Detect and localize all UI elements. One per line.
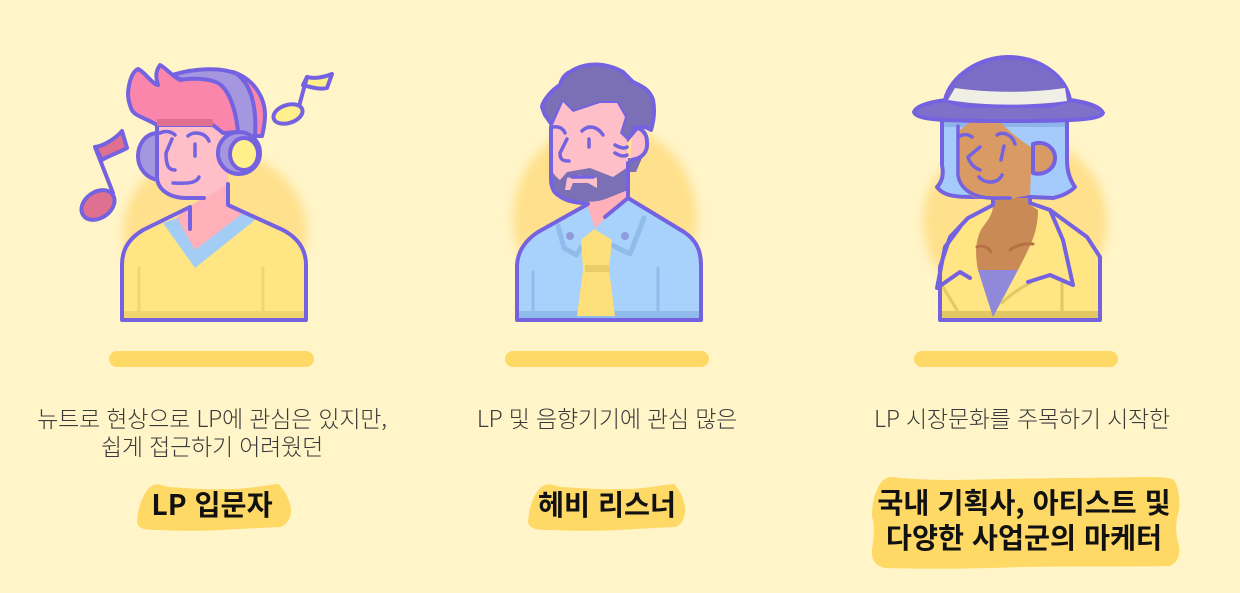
heading right <box>877 481 1171 557</box>
ear shadow <box>628 158 642 172</box>
hat band <box>948 88 1067 105</box>
facial features <box>553 127 627 177</box>
description right: LP 시장문화를 주목하기 시작한 <box>874 400 1170 434</box>
divider bar left <box>109 351 314 367</box>
divider bar right <box>914 351 1118 367</box>
headband back strip <box>233 72 265 136</box>
neck and chest <box>976 198 1038 270</box>
collar <box>558 218 644 255</box>
description centre: LP 및 음향기기에 관심 많은 <box>477 400 737 434</box>
highlight blob left <box>137 484 291 531</box>
description left <box>37 400 387 462</box>
body outlines <box>122 125 306 320</box>
ear <box>630 128 647 160</box>
face <box>157 125 228 198</box>
beard <box>551 167 628 202</box>
shirt <box>122 207 306 320</box>
character: marketer with hat <box>914 57 1107 320</box>
character: LP beginner with headphones <box>76 65 332 320</box>
description left: 쉽게 접근하기 어려웠던 <box>101 428 323 462</box>
right headphone <box>218 132 260 174</box>
ear <box>1033 143 1055 174</box>
face <box>551 102 628 195</box>
music note left <box>76 131 127 226</box>
description left: 뉴트로 현상으로 LP에 관심은 있지만, <box>37 400 387 434</box>
heading left: LP 입문자 <box>151 483 273 524</box>
glow <box>923 134 1107 310</box>
character: heavy listener with beard <box>513 64 701 320</box>
heading right: 국내 기획사, 아티스트 및 <box>877 481 1171 522</box>
facial features <box>958 126 1015 198</box>
hair <box>937 120 1075 198</box>
face <box>960 122 1031 199</box>
heading right: 다양한 사업군의 마케터 <box>886 516 1162 557</box>
hat brim <box>914 100 1103 121</box>
jacket <box>517 198 701 320</box>
outlines <box>517 127 701 320</box>
jacket <box>940 207 1100 320</box>
music note right <box>271 74 332 127</box>
left headphone <box>138 133 158 180</box>
divider bar centre <box>505 351 709 367</box>
hair <box>128 65 238 133</box>
collar outlines <box>937 197 1100 320</box>
tie <box>577 229 615 316</box>
glow <box>513 123 697 313</box>
heading centre: 헤비 리스너 <box>538 483 676 524</box>
highlight blob centre <box>528 484 685 531</box>
hat crown <box>945 57 1070 106</box>
jacket details <box>943 283 1062 310</box>
facial features <box>160 132 209 183</box>
inner shirt <box>978 270 1018 317</box>
headband <box>172 69 255 136</box>
collar and neck <box>176 184 245 252</box>
glow <box>123 150 307 314</box>
neck <box>586 190 628 228</box>
highlight blob right <box>872 477 1179 569</box>
hair <box>542 64 654 140</box>
